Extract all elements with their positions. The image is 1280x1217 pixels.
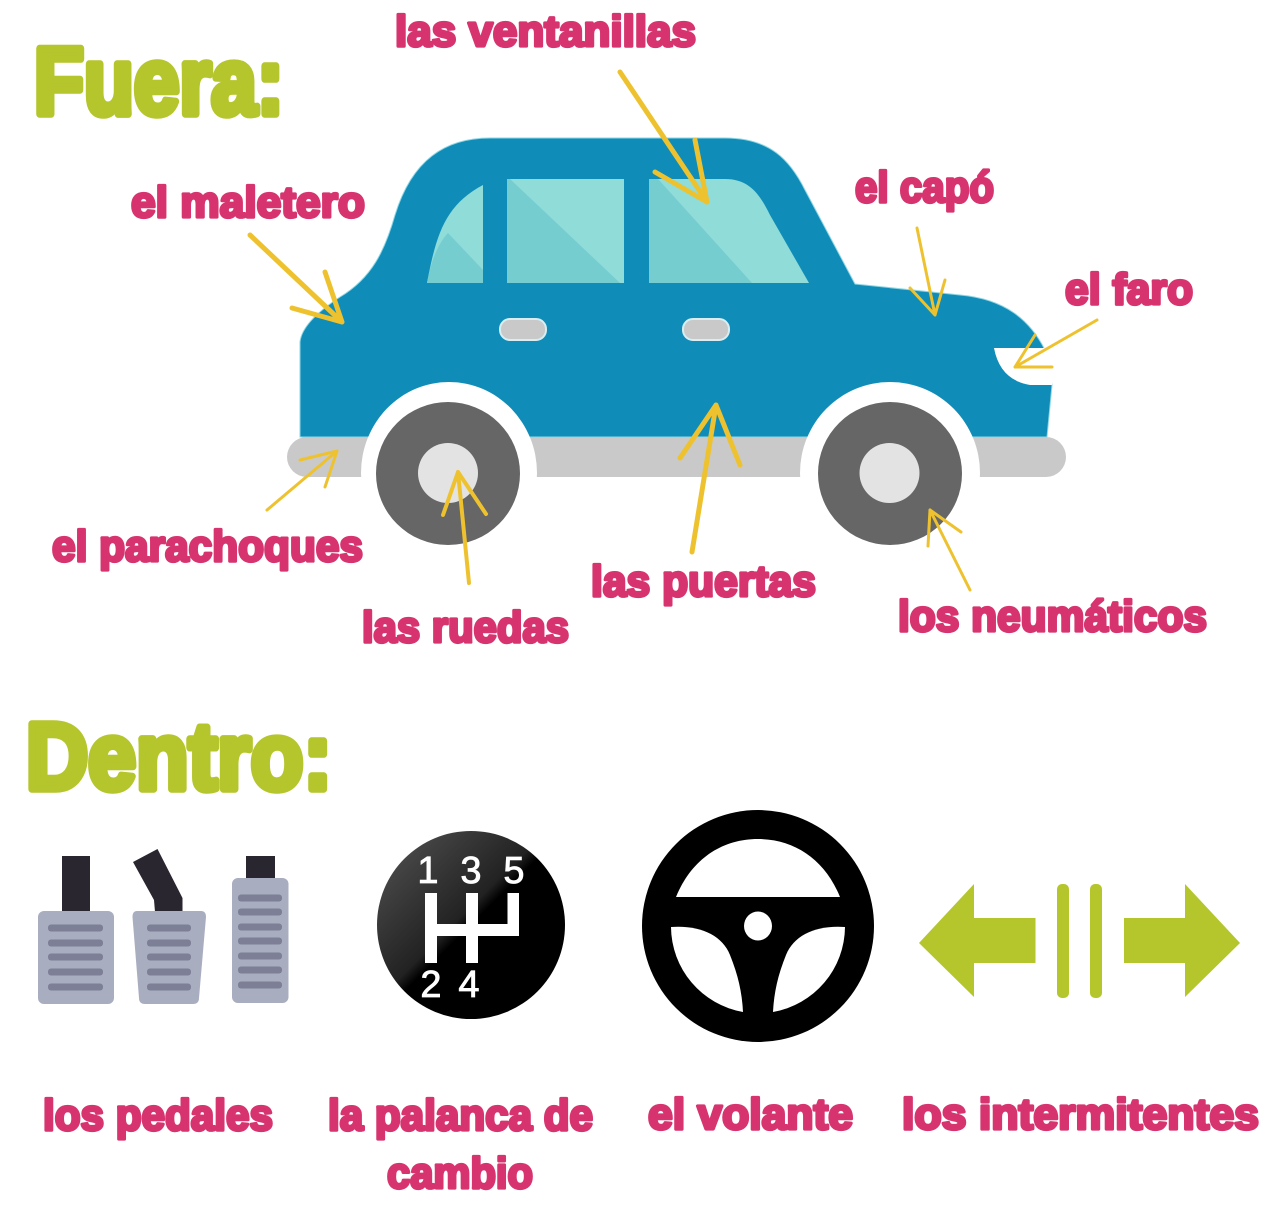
brake pedal [132, 849, 206, 1004]
door handle front [683, 319, 729, 340]
car body [300, 138, 1052, 437]
icon: gear knob: 2 [420, 964, 442, 1006]
icon: pedals [38, 849, 288, 1004]
icon: gear knob: 3 [460, 850, 482, 892]
label: el maletero: el maletero [131, 178, 365, 227]
accelerator pedal [232, 856, 288, 1003]
rear window [427, 185, 483, 283]
icon: gear knob: 5 [503, 850, 525, 892]
label: el parachoques: el parachoques [52, 522, 363, 571]
label: el faro: el faro [1065, 265, 1193, 314]
label: los neumáticos: los neumáticos [898, 592, 1207, 641]
front wheel [800, 382, 980, 567]
label: las ruedas: las ruedas [362, 603, 569, 652]
arrow: el faro [1015, 320, 1097, 367]
arrow: las puertas [680, 405, 740, 552]
label: la palanca de cambio [328, 1091, 593, 1198]
title: Fuera: Fuera: [34, 29, 284, 135]
label: el capó: el capó [855, 163, 994, 212]
arrow: el parachoques [267, 451, 337, 510]
label: la palanca de cambio: la palanca de [328, 1091, 593, 1140]
label: los intermitentes: los intermitentes [902, 1090, 1259, 1139]
arrow: el capó [910, 228, 945, 315]
label: las ventanillas: las ventanillas [395, 7, 696, 56]
arrow: las ventanillas [620, 72, 707, 202]
label: el volante: el volante [648, 1090, 853, 1139]
arrow: el maletero [250, 235, 342, 322]
bumper [287, 437, 1066, 477]
icon: gear knob: 4 [458, 964, 480, 1006]
icon: gear knob [377, 831, 565, 1019]
icon: steering wheel [642, 810, 874, 1042]
icon: gear knob: 1 [417, 850, 439, 892]
front window [649, 179, 809, 283]
headlight [994, 348, 1052, 385]
arrow: las ruedas [443, 472, 486, 583]
door handle rear [500, 319, 546, 340]
clutch pedal [38, 856, 114, 1004]
label: las puertas: las puertas [591, 557, 816, 606]
label: los pedales: los pedales [43, 1091, 273, 1140]
icon: indicator arrows [919, 884, 1240, 998]
middle window [507, 179, 624, 283]
rear wheel [360, 382, 540, 567]
arrow: los neumáticos [928, 510, 970, 590]
label: la palanca de cambio: cambio [387, 1149, 533, 1198]
title: Dentro: Dentro: [26, 704, 332, 810]
illustration: car [287, 138, 1066, 567]
